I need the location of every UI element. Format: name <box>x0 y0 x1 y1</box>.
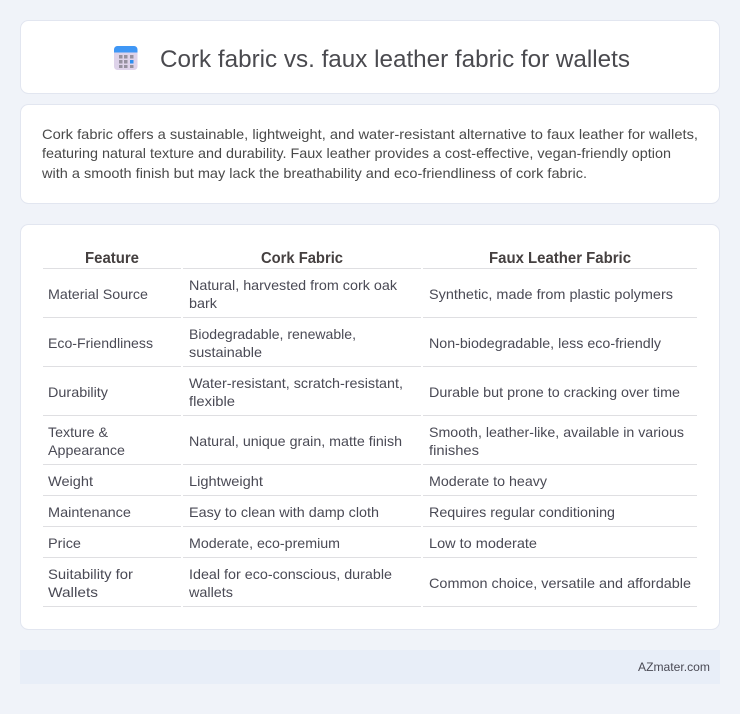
row: eco-friendliness: Biodegradable, renewable, <box>189 326 356 342</box>
text block: introduction: with a smooth finish but may lack the breathability and eco-friendliness of cork fabric. <box>41 165 587 181</box>
row: texture and appearance: finishes <box>429 442 479 458</box>
row: eco-friendliness: Non-biodegradable, less eco-friendly <box>429 335 661 351</box>
row: material source: Synthetic, made from plastic polymers <box>429 286 673 302</box>
row: price: Price <box>48 535 81 551</box>
row: maintenance: Easy to clean with damp cloth <box>189 504 379 520</box>
row: eco-friendliness <box>48 326 661 360</box>
row: durability: Water-resistant, scratch-resistant, <box>189 375 403 391</box>
row: durability: flexible <box>189 393 235 409</box>
row: material source <box>48 277 673 311</box>
row: material source: bark <box>189 295 218 311</box>
row: texture and appearance: Natural, unique grain, matte finish <box>189 433 402 449</box>
row: suitability for wallets: Ideal for eco-conscious, durable <box>189 566 392 582</box>
row: price: Low to moderate <box>429 535 537 551</box>
row: durability: Durability <box>48 384 108 400</box>
row: material source: Material Source <box>48 286 148 302</box>
row: weight: Moderate to heavy <box>429 473 547 489</box>
row: suitability for wallets <box>48 566 691 600</box>
row: price: Moderate, eco-premium <box>189 535 340 551</box>
row: suitability for wallets: Suitability for <box>48 566 133 582</box>
row: weight: Lightweight <box>189 473 263 489</box>
row: weight <box>48 473 547 489</box>
row: suitability for wallets: wallets <box>188 584 233 600</box>
row: texture and appearance: Texture & <box>48 424 109 440</box>
text block: introduction: featuring natural texture and durability. Faux leather provides a cost-effective, vegan-friendly option <box>42 145 671 161</box>
table header row <box>85 250 631 267</box>
title: Cork fabric vs. faux leather fabric for wallets <box>160 46 630 73</box>
panel: title card <box>20 20 720 94</box>
row: suitability for wallets: Wallets <box>48 584 98 600</box>
row: texture and appearance: Smooth, leather-like, available in various <box>429 424 684 440</box>
table header row: Feature <box>85 250 139 267</box>
table header row: Faux Leather Fabric <box>489 250 631 267</box>
icon: calendar <box>114 46 138 70</box>
row: texture and appearance: Appearance <box>48 442 125 458</box>
row: maintenance: Maintenance <box>48 504 131 520</box>
row: price <box>48 535 537 551</box>
row: texture and appearance <box>48 424 684 458</box>
row: maintenance <box>48 504 615 520</box>
row: durability: Durable but prone to cracking over time <box>429 384 680 400</box>
row: maintenance: Requires regular conditioning <box>429 504 615 520</box>
footer credit: AZmater.com <box>638 660 710 674</box>
panel: comparison table <box>20 224 720 630</box>
row: eco-friendliness: Eco-Friendliness <box>48 335 153 351</box>
row: weight: Weight <box>48 473 93 489</box>
table header row: Cork Fabric <box>261 250 343 267</box>
row: eco-friendliness: sustainable <box>189 344 262 360</box>
row: durability <box>48 375 680 409</box>
row: material source: Natural, harvested from cork oak <box>189 277 398 293</box>
panel: introduction <box>20 104 720 204</box>
row: suitability for wallets: Common choice, versatile and affordable <box>429 575 691 591</box>
text block: introduction <box>41 126 698 181</box>
text block: introduction: Cork fabric offers a sustainable, lightweight, and water-resistant alternative to faux leather for wallets, <box>42 126 698 142</box>
footer bar <box>20 650 720 684</box>
